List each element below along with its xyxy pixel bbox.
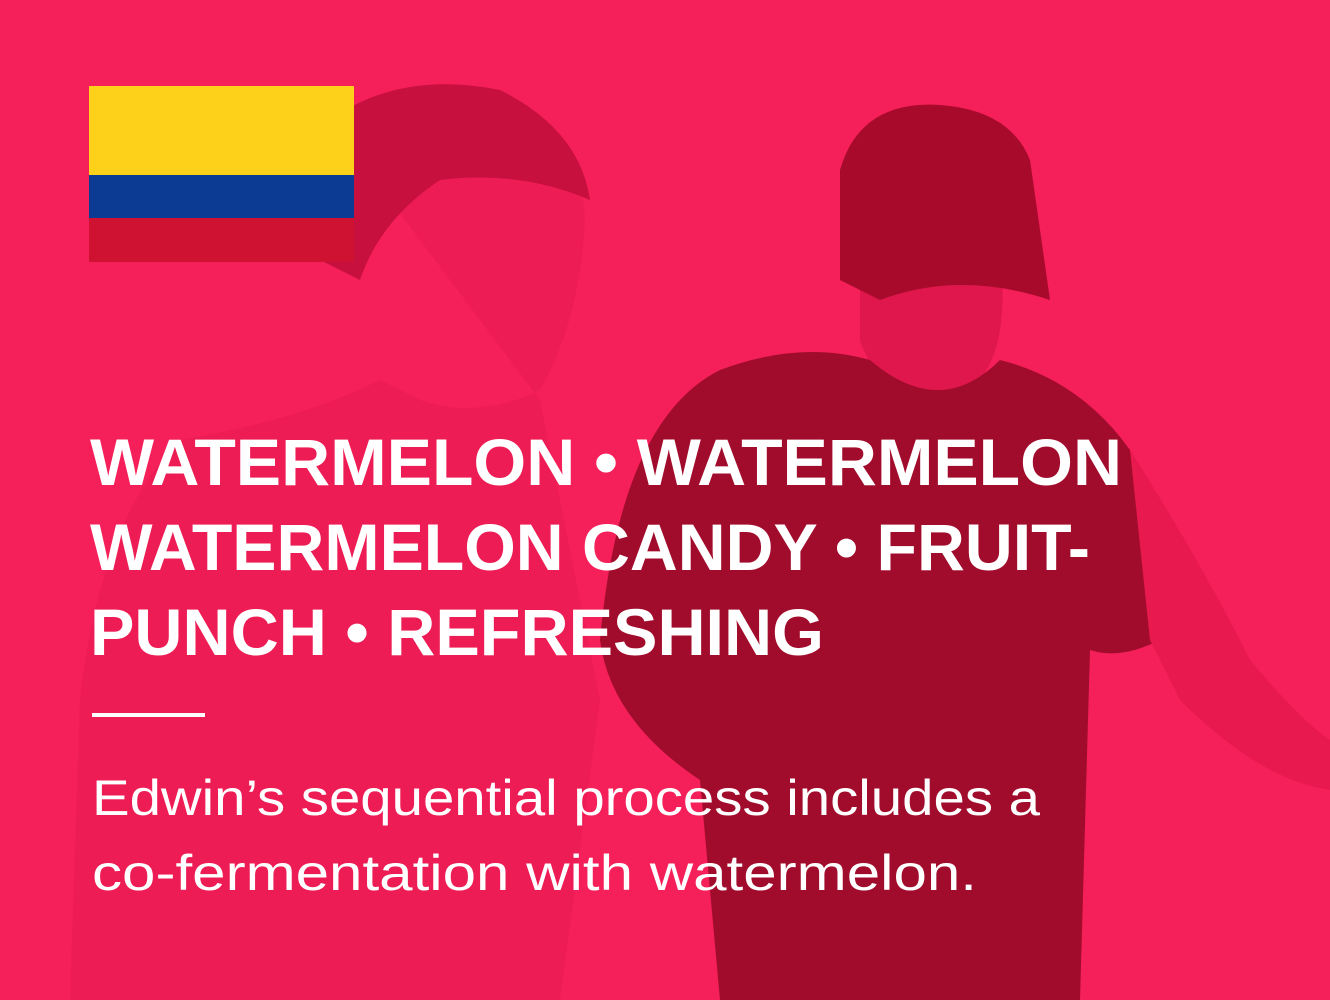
description text: co-fermentation with watermelon. — [92, 845, 977, 901]
left man silhouette — [70, 84, 600, 1000]
right man silhouette — [600, 105, 1330, 1000]
flag: Colombia — [89, 86, 354, 262]
title: flavor notes: WATERMELON CANDY • FRUIT- — [90, 510, 1090, 584]
description text: Edwin’s sequential process includes a — [92, 770, 1040, 826]
title: flavor notes: WATERMELON • WATERMELON — [90, 425, 1122, 499]
divider rule — [92, 713, 205, 717]
title: flavor notes: PUNCH • REFRESHING — [90, 595, 824, 669]
